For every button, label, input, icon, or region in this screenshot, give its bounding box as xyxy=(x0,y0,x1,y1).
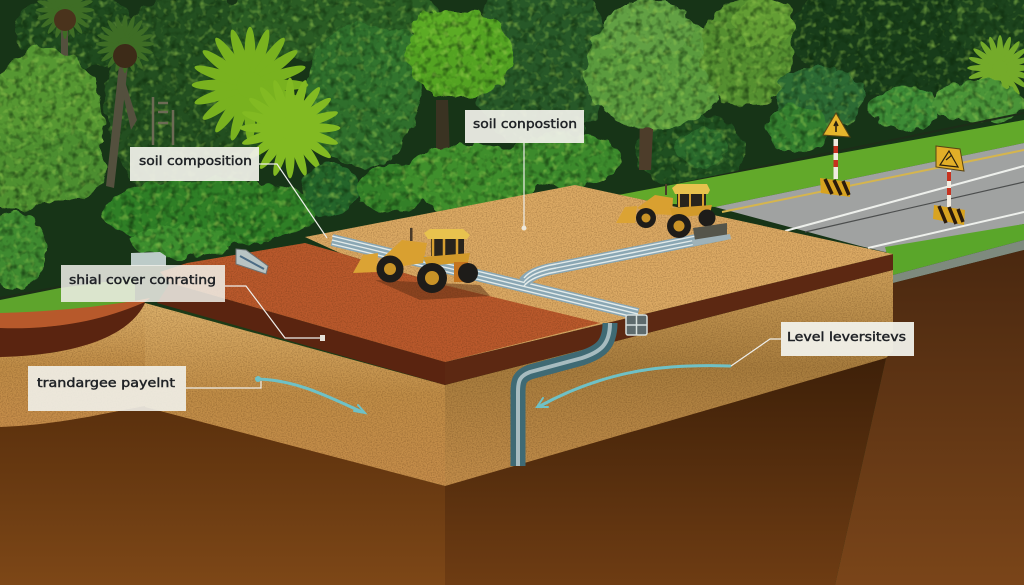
roadside grass, lower xyxy=(885,224,1024,275)
leader dot xyxy=(522,226,526,230)
dark band, left face xyxy=(157,283,445,385)
palm trees xyxy=(36,0,1024,178)
left terrain cross-section xyxy=(0,278,150,585)
callout: shial cover conrating xyxy=(61,265,325,341)
dark band, right face xyxy=(445,254,893,385)
bucket xyxy=(353,253,378,273)
callout text: soil conpostion xyxy=(473,116,577,131)
cab xyxy=(423,229,470,282)
pipe: vertical drop xyxy=(518,323,610,466)
small pipe machine xyxy=(236,249,268,274)
callout text: Level leversitevs xyxy=(787,329,906,344)
left dark topsoil xyxy=(0,302,145,358)
water flow arrow, left xyxy=(255,376,365,413)
sand layer, left face xyxy=(145,303,445,486)
pipe: vertical drop core xyxy=(518,323,610,466)
sand top surface xyxy=(305,185,893,362)
callout: trandargee payelnt xyxy=(28,366,261,411)
callout text: soil composition xyxy=(139,153,252,168)
pipe: main run xyxy=(332,240,638,314)
pipe: main run highlights xyxy=(332,236,638,318)
deep soil, left face xyxy=(145,406,445,585)
warning sign 1 xyxy=(820,113,850,197)
shrubs xyxy=(102,81,1024,258)
leader line xyxy=(523,143,525,227)
utility box xyxy=(131,252,166,266)
red topsoil surface xyxy=(160,243,600,362)
hood xyxy=(378,240,427,270)
deep soil, right face xyxy=(445,349,893,585)
forest background xyxy=(0,0,1024,310)
pipe: branch xyxy=(524,234,726,282)
cab xyxy=(670,184,712,218)
hood xyxy=(637,195,673,215)
bulldozer, centre xyxy=(353,228,490,300)
pipe: end fitting xyxy=(626,315,647,335)
leader line xyxy=(186,381,261,388)
far right cutaway soil xyxy=(835,250,1024,585)
callout text: shial cover conrating xyxy=(69,272,216,287)
road yellow centre line xyxy=(722,150,1024,212)
callout: soil composition xyxy=(130,147,327,238)
callout: soil conpostion xyxy=(465,110,584,230)
exhaust xyxy=(410,228,412,241)
leader dot xyxy=(320,335,325,341)
left grass xyxy=(0,278,135,315)
wheels xyxy=(376,256,478,293)
kerb xyxy=(893,240,1024,283)
warning sign 2 xyxy=(933,146,965,225)
utility poles xyxy=(153,97,173,145)
tree trunks xyxy=(61,20,654,188)
drainage pipe network xyxy=(332,230,726,466)
water flow arrow, right xyxy=(537,366,730,407)
dark rear trees xyxy=(15,0,1024,210)
road white lane lines xyxy=(785,166,1024,248)
wheels xyxy=(636,208,716,238)
sand layer, right face xyxy=(445,270,893,486)
exhaust xyxy=(665,184,667,195)
bulldozer, rear xyxy=(616,184,731,246)
left sand layer xyxy=(0,303,145,428)
soil block xyxy=(145,185,893,585)
leader line xyxy=(225,286,322,338)
blade xyxy=(692,223,731,246)
callout: Level leversitevs xyxy=(731,322,914,366)
left red soil xyxy=(0,298,150,329)
hedge lines xyxy=(0,113,1024,298)
road xyxy=(715,143,1024,252)
leader line xyxy=(731,339,781,366)
left deep soil xyxy=(0,406,145,585)
callout text: trandargee payelnt xyxy=(37,375,175,390)
pipe: branch highlights xyxy=(524,230,726,286)
roadside grass, upper xyxy=(618,120,1024,207)
bucket xyxy=(616,206,637,223)
broadleaf trees xyxy=(0,0,864,288)
ground shadow xyxy=(375,280,490,300)
leader line xyxy=(259,164,327,238)
